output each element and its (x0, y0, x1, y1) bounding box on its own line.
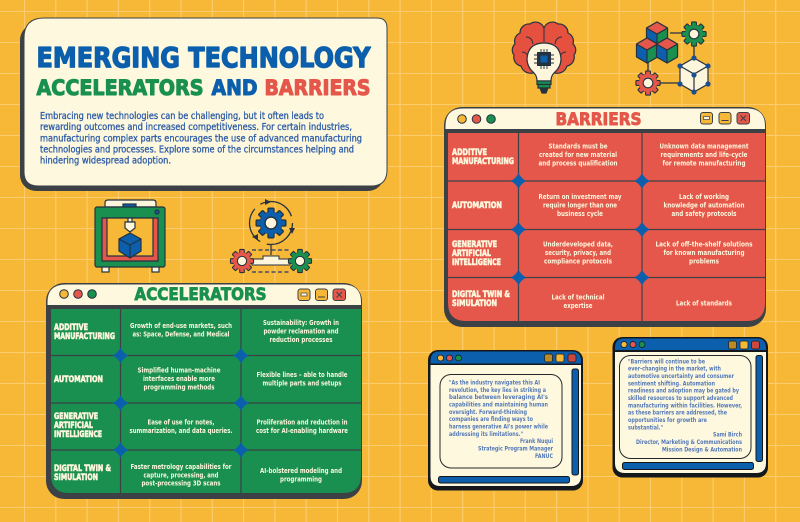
quote text: oversight. Forward-thinking (449, 410, 527, 416)
row: digital twin (452, 289, 732, 310)
window title bar: BARRIERS (556, 110, 642, 130)
row: additive manufacturing: Growth of end-use markets, such (130, 321, 232, 330)
icon: cube and gear network (636, 22, 711, 95)
row: digital twin (54, 462, 342, 488)
quote text: "As the industry navigates this AI (449, 380, 540, 386)
row: automation: knowledge of automation (664, 200, 744, 210)
quote text: manufacturing within facilities. However, (628, 403, 742, 409)
row: digital twin: expertise (564, 301, 593, 310)
row: generative AI: GENERATIVE (54, 411, 98, 421)
icon: brain with light bulb (512, 22, 576, 93)
intro text: technologies and processes. Explore some of the circumstances helping and (40, 144, 354, 156)
intro text: hindering widespread adoption. (40, 156, 171, 166)
row: generative AI: INTELLIGENCE (452, 257, 501, 267)
panel: quote window Frank Nuqui (428, 350, 583, 490)
row: generative AI: GENERATIVE (452, 239, 497, 249)
row: automation: programming methods (144, 382, 214, 392)
cube cluster (636, 22, 678, 63)
window title bar: ACCELERATORS (134, 285, 266, 305)
quote text: "Barriers will continue to be (628, 359, 705, 365)
title line 2: ACCELERATORS (36, 76, 204, 101)
quote text: Sami Birch (713, 433, 742, 439)
intro text: rewarding outcomes and increased competitiveness. For certain industries, (40, 122, 352, 133)
quote text: companies are finding ways to (449, 417, 533, 423)
row: digital twin: programming (280, 474, 322, 484)
row: generative AI: cost for AI-enabling hardware (256, 426, 348, 435)
row: additive manufacturing: MANUFACTURING (452, 156, 514, 166)
row: generative AI: for known manufacturing (664, 248, 744, 257)
row: generative AI: Underdeveloped data, (543, 240, 613, 248)
row: generative AI (452, 239, 752, 267)
quote text: Director, Marketing & Communications (636, 440, 742, 446)
quote text: readiness and adoption may be gated by (628, 389, 739, 395)
icon: 3D printer (95, 200, 165, 272)
row: additive manufacturing: as: Space, Defense, and Medical (132, 330, 230, 338)
row: automation: Simplified human-machine (138, 366, 221, 374)
row: automation: interfaces enable more (143, 374, 215, 383)
row: additive manufacturing: ADDITIVE (452, 147, 487, 157)
row: additive manufacturing: Standards must be (548, 142, 608, 150)
panel: barriers window (444, 107, 766, 327)
window title bar (48, 284, 361, 305)
row: additive manufacturing: ADDITIVE (54, 322, 88, 332)
row: generative AI: Proliferation and reduction in (256, 418, 348, 426)
quote text: automotive uncertainty and consumer (628, 374, 734, 380)
icon: gears process (230, 199, 312, 273)
quote text: addressing its limitations." (449, 432, 523, 438)
quote text: FANUC (535, 454, 553, 460)
row: generative AI: ARTIFICIAL (452, 248, 491, 258)
row: additive manufacturing: and process qualification (538, 158, 618, 168)
row: automation (452, 192, 744, 218)
panel: quote window Sami Birch (612, 337, 768, 478)
title line 2 (36, 76, 370, 101)
row: additive manufacturing: created for new material (539, 150, 617, 159)
row: additive manufacturing: for remote manufacturing (662, 158, 746, 168)
row: generative AI: INTELLIGENCE (54, 429, 102, 439)
row: digital twin: Lack of technical (552, 292, 604, 302)
quote text: Strategic Program Manager (478, 446, 553, 452)
quote text: Frank Nuqui (520, 439, 553, 445)
title line 1: EMERGING TECHNOLOGY (36, 42, 371, 74)
intro text (40, 111, 362, 166)
quote text: ever-changing in the market, with (628, 367, 721, 373)
row: automation: multiple parts and setups (262, 378, 342, 388)
row: automation: require longer than one (543, 200, 617, 210)
quote text: skilled resources to support advanced (628, 396, 733, 402)
quote text: as these barriers are addressed, the (628, 411, 727, 417)
row: generative AI: Ease of use for notes, (148, 418, 214, 426)
quote text: Mission Design & Automation (662, 447, 742, 453)
row: digital twin: DIGITAL TWIN & (452, 289, 510, 299)
quote text: opportunities for growth are (628, 418, 707, 424)
quote text: capabilities and maintaining human (449, 402, 548, 408)
row: automation: AUTOMATION (54, 374, 103, 384)
row: generative AI: compliance protocols (544, 256, 612, 266)
row: generative AI: ARTIFICIAL (54, 420, 93, 430)
row: automation: AUTOMATION (452, 200, 502, 210)
title line 2: BARRIERS (264, 76, 370, 101)
row: automation: and safety protocols (672, 209, 736, 218)
title line 2: AND (212, 76, 258, 101)
row: generative AI: security, privacy, and (545, 248, 611, 257)
quote text: revolution, the key lies in striking a (449, 388, 546, 394)
row: additive manufacturing: Unknown data management (660, 142, 749, 150)
intro text: manufacturing complex parts encourages the use of advanced manufacturing (40, 134, 362, 144)
row: digital twin: DIGITAL TWIN & (54, 463, 111, 473)
row: generative AI: summarization, and data queries. (130, 426, 232, 435)
window title bar (446, 108, 765, 130)
row: additive manufacturing: MANUFACTURING (54, 331, 115, 341)
quote text: sentiment shifting. Automation (628, 381, 715, 387)
row: additive manufacturing: reduction processes (270, 335, 332, 344)
row: digital twin: AI-bolstered modeling and (260, 466, 342, 475)
row: automation (54, 366, 348, 392)
row: additive manufacturing: Sustainability: Growth in (263, 318, 339, 327)
row: generative AI: problems (689, 256, 719, 266)
row: additive manufacturing: powder reclamation and (264, 326, 338, 336)
row: digital twin: Faster metrology capabilities for (130, 462, 232, 471)
row: automation: business cycle (557, 209, 603, 218)
quote text (628, 359, 742, 453)
quote text: harness generative AI's power while (449, 424, 548, 430)
row: digital twin: capture, processing, and (144, 470, 218, 480)
row: generative AI: Lack of off-the-shelf solutions (656, 240, 752, 248)
white cube (677, 55, 711, 95)
row: automation: Return on investment may (538, 192, 622, 201)
row: additive manufacturing (452, 142, 749, 168)
quote text (449, 380, 553, 460)
row: digital twin: Lack of standards (676, 298, 732, 308)
accelerators table (51, 309, 361, 493)
panel: title card (20, 18, 387, 191)
row: digital twin: SIMULATION (452, 298, 497, 308)
row: additive manufacturing: requirements and life-cycle (660, 150, 748, 159)
quote text: substantial." (628, 425, 663, 431)
quote text: balance between leveraging AI's (449, 395, 548, 401)
row: automation: Flexible lines – able to handle (256, 370, 348, 379)
row: additive manufacturing (54, 318, 339, 344)
intro text: Embracing new technologies can be challenging, but it often leads to (40, 111, 324, 122)
row: digital twin: SIMULATION (54, 472, 98, 482)
row: generative AI (54, 411, 348, 439)
row: automation: Lack of working (679, 192, 729, 201)
row: digital twin: post-processing 3D scans (142, 478, 220, 488)
barriers table (448, 133, 765, 321)
panel: accelerators window (46, 283, 362, 499)
